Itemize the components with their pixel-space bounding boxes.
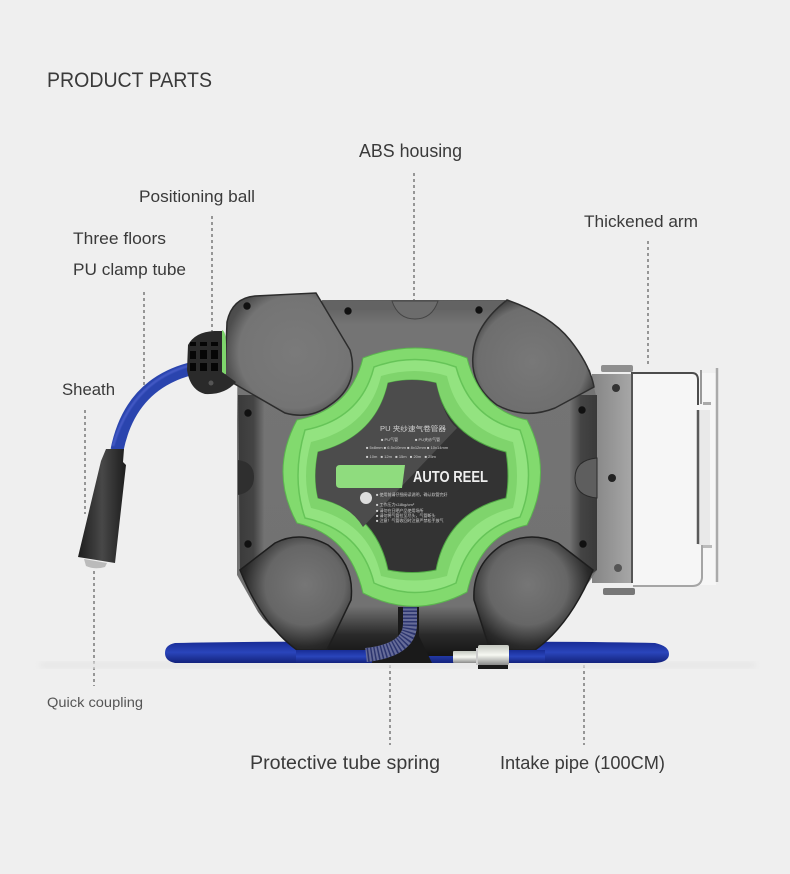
arm interior xyxy=(632,373,716,585)
label: positioning ball: Positioning ball xyxy=(139,187,255,206)
centre label plate xyxy=(316,380,508,572)
ring outer xyxy=(283,348,540,606)
auto reel wordmark: AUTO REEL xyxy=(413,469,488,486)
positioning ball guide xyxy=(187,330,236,394)
plate spec rows: ■ PU气管 xyxy=(381,436,398,442)
plate instructions: ■ 使用前请仔细阅读说明，确认软管完好 xyxy=(376,491,448,497)
quick coupling connector xyxy=(78,449,126,568)
plate spec rows xyxy=(366,436,449,459)
label: quick coupling: Quick coupling xyxy=(47,694,143,710)
label: three floors PU clamp tube xyxy=(73,229,186,279)
plate spec rows: ■ 5x8mm ■ 6.5x10mm ■ 8x12mm ■ 10x14mm xyxy=(366,445,449,450)
plate instructions: ■ 请勿在日晒产品使用场所 xyxy=(376,507,424,513)
protective tube spring xyxy=(366,607,432,663)
wall bracket arm xyxy=(592,365,717,595)
label: protective tube spring: Protective tube spring xyxy=(250,753,440,774)
blue PU clamp tube xyxy=(113,366,190,450)
plate instructions: ■ 注意！气管收回时注意严禁松手放气 xyxy=(376,517,444,523)
arm rods xyxy=(631,373,698,405)
label: intake pipe: Intake pipe (100CM) xyxy=(500,753,665,773)
label: three floors PU clamp tube: Three floors xyxy=(73,229,166,248)
plate spec rows: ■ PU夹纱气管 xyxy=(415,436,440,442)
housing screws xyxy=(243,302,587,548)
top notch xyxy=(392,301,438,319)
main body xyxy=(237,300,597,656)
ring inner ridge xyxy=(306,371,517,580)
ring mid xyxy=(298,360,528,592)
top band xyxy=(322,300,505,319)
plate glare xyxy=(316,380,457,527)
floor shadow xyxy=(40,662,755,668)
label: thickened arm: Thickened arm xyxy=(584,212,698,231)
blue intake hose loop xyxy=(165,642,669,663)
side clips xyxy=(238,460,254,495)
plate instructions: ■ 请勿将气管拉至尽头，气管断头 xyxy=(376,512,436,518)
plate heading: PU 夹纱速气卷管器 xyxy=(380,424,446,433)
green ring xyxy=(283,348,540,606)
corner cap: bottom right xyxy=(474,537,593,650)
pivot caps xyxy=(601,365,633,372)
label: sheath: Sheath xyxy=(62,380,115,399)
reel housing xyxy=(225,293,597,656)
label: three floors PU clamp tube: PU clamp tube xyxy=(73,260,186,279)
guide grid holes xyxy=(190,342,218,371)
front hose over housing xyxy=(180,648,545,663)
side shading xyxy=(238,395,264,600)
label: ABS housing: ABS housing xyxy=(359,141,462,161)
intake coupling xyxy=(453,645,509,669)
bracket plate xyxy=(592,374,633,583)
plate instructions: ■ 工作压力≤18kg/cm² xyxy=(376,501,415,507)
corner cap: top left xyxy=(225,293,352,415)
corner cap: top right xyxy=(473,300,594,413)
plate spec rows: ■ 10m ■ 12m ■ 15m ■ 20m ■ 25m xyxy=(366,454,437,459)
title: PRODUCT PARTS xyxy=(47,69,212,92)
plate instructions xyxy=(376,491,448,523)
leader lines xyxy=(85,173,648,745)
warning icon xyxy=(360,492,372,504)
bracket screws xyxy=(612,384,620,392)
corner cap: bottom left xyxy=(240,537,352,650)
green label block xyxy=(336,465,405,488)
